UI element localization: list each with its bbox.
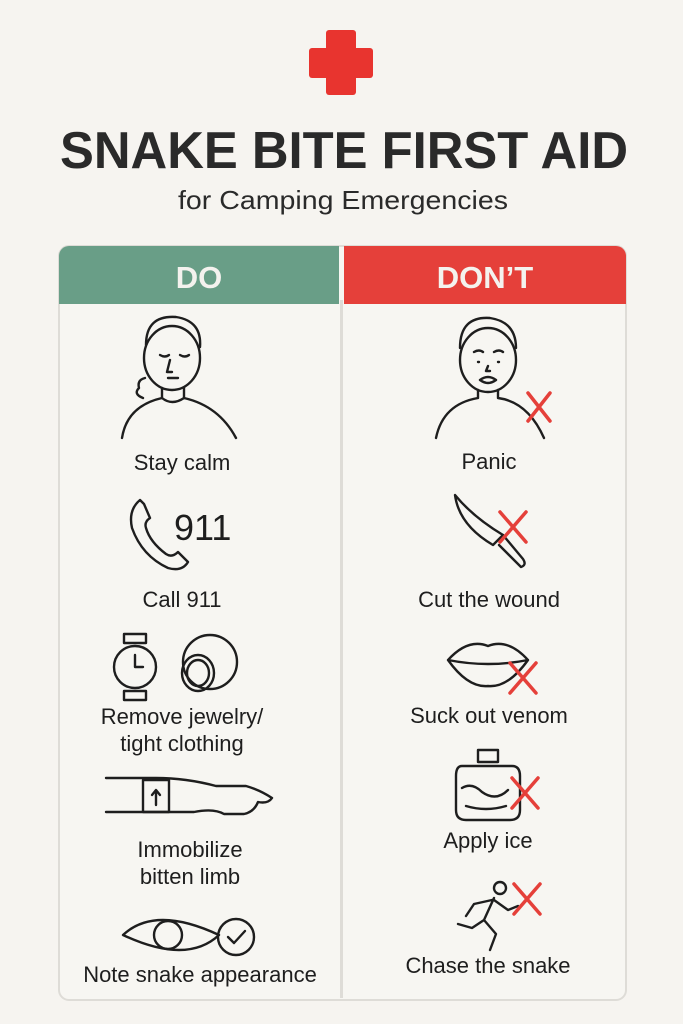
labels: DO: Remove jewelry/: [101, 704, 264, 729]
header: DO: DO: [176, 260, 222, 295]
labels: DON'T: Apply ice: [443, 828, 533, 853]
labels: DO: tight clothing: [120, 731, 244, 756]
labels: DON'T: [405, 449, 571, 978]
icon: phone 911: [131, 500, 188, 569]
labels: DON'T: Chase the snake: [405, 953, 571, 978]
labels: DO: [83, 450, 317, 987]
phone text 911: 911: [174, 507, 231, 548]
subtitle: for Camping Emergencies: [178, 185, 508, 215]
icon: watch and ring: [114, 634, 237, 700]
header: DON'T: [344, 246, 626, 304]
header: DO: [59, 246, 339, 304]
icon: lips: [448, 644, 528, 686]
title: SNAKE BITE FIRST AID: [60, 122, 628, 180]
labels: DON'T: Suck out venom: [410, 703, 568, 728]
icon: calm person: [122, 317, 236, 438]
icon: running person: [458, 882, 518, 950]
labels: DO: Stay calm: [134, 450, 230, 475]
icon: ice pack: [456, 750, 520, 820]
labels: DO: Note snake appearance: [83, 962, 317, 987]
icon: knife: [455, 495, 525, 567]
labels: DON'T: Panic: [461, 449, 517, 474]
icon: panicked person: [436, 318, 544, 438]
icon: red cross: [309, 30, 373, 95]
icon: eye and check: [123, 919, 254, 955]
labels: DO: bitten limb: [140, 864, 240, 889]
labels: DO: Immobilize: [137, 837, 243, 862]
icon: immobilized arm: [106, 778, 272, 814]
labels: DON'T: Cut the wound: [418, 587, 560, 612]
labels: DO: Call 911: [142, 587, 222, 612]
header: DON'T: DON’T: [437, 260, 533, 295]
red X marks: [500, 393, 550, 914]
panel: table: [59, 246, 626, 1000]
